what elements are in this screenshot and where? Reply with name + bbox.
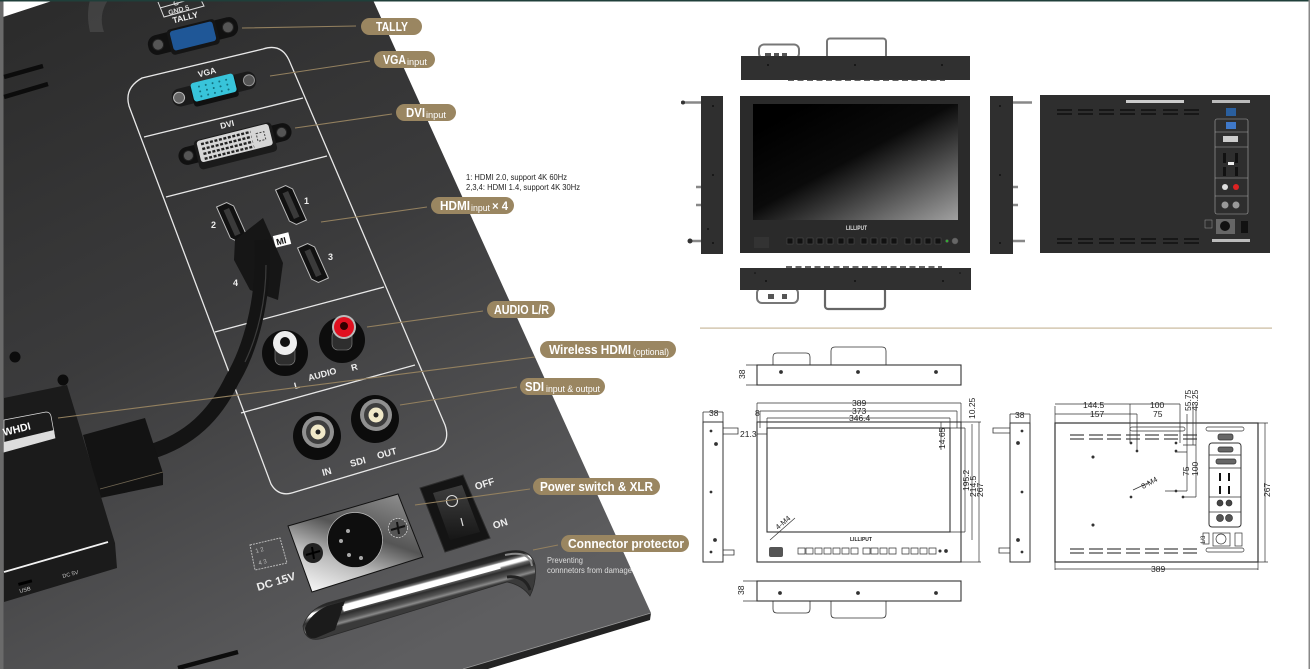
label: TALLY (361, 18, 422, 35)
label: SDI input and output (520, 378, 605, 395)
icon: chrome connector protector handle (303, 551, 535, 639)
drawing: rear view with dimensions: 1/3 (1201, 535, 1207, 544)
tally pin label box: G (173, 0, 180, 8)
label: DVI input (396, 104, 456, 121)
page top rule (0, 0, 1310, 2)
drawing: left side view (703, 408, 738, 562)
icon: RCA audio jacks: L (293, 380, 301, 391)
drawing: left side view: 38 (709, 408, 719, 418)
label: DVI input: DVI (406, 105, 425, 120)
drawing: rear view with dimensions: 144.5 (1083, 400, 1105, 410)
icon: DVI connector: DVI (219, 118, 235, 131)
icon: VGA connector (167, 56, 259, 112)
icon: DC 15V pin diagram (250, 538, 298, 594)
icon: DC 15V pin diagram: 4 3 (258, 559, 268, 567)
drawing: front view with dimensions: 4-M4 (774, 514, 792, 532)
page right edge (1308, 0, 1310, 669)
icon: HDMI ports: 4 (233, 278, 238, 288)
drawing: bottom view (736, 581, 961, 618)
label: HDMI input x 4: × 4 (492, 199, 508, 213)
note: HDMI versions (466, 173, 580, 192)
drawing: front view with dimensions: 373 (852, 406, 866, 416)
drawing: rear view with dimensions: 389 (1151, 564, 1165, 574)
wireless HDMI module: USB (19, 586, 32, 595)
drawing: right side view (993, 410, 1030, 562)
drawing: rear view with dimensions: 157 (1090, 409, 1104, 419)
wireless HDMI module (2, 385, 117, 602)
icon: HDMI ports (211, 183, 333, 288)
icon: SDI BNC connectors: OUT (376, 446, 398, 462)
label: AUDIO L/R: AUDIO L/R (494, 302, 549, 317)
label: SDI input and output: input & output (546, 384, 600, 395)
label: Connector protector: Connector protector (568, 536, 684, 551)
icon: HDMI ports: MI (275, 235, 287, 247)
drawing: rear view with dimensions: 43.25 (1190, 389, 1200, 411)
tally pin label box: GND 5 (168, 5, 190, 17)
front buttons (754, 237, 958, 248)
drawing: front view with dimensions: 14.65 (937, 427, 947, 449)
drawing: rear view with dimensions: 100 (1190, 462, 1200, 476)
note: protector caption (547, 556, 632, 575)
icon: power rocker switch: ON (492, 517, 509, 532)
label: VGA input: VGA (383, 52, 406, 67)
drawing: rear view with dimensions: 100 (1150, 400, 1164, 410)
drawing: right side view: 38 (1015, 410, 1025, 420)
wireless HDMI module: DC 5V (62, 570, 79, 580)
label: Power switch and XLR: Power switch & XLR (540, 479, 654, 494)
note: protector caption: Preventing (547, 556, 583, 565)
drawing: front view with dimensions: 195.2 (961, 469, 971, 491)
front logo: LILLIPUT (846, 225, 867, 232)
icon: power rocker switch (420, 475, 509, 552)
icon: HDMI ports: 1 (304, 196, 309, 206)
label: Wireless HDMI optional: (optional) (633, 347, 669, 357)
label: HDMI input x 4 (431, 197, 514, 214)
icon: HDMI ports: 2 (211, 220, 216, 230)
label: HDMI input x 4: HDMI (440, 198, 470, 213)
monitor right side view (990, 96, 1032, 254)
icon: TALLY connector (142, 1, 241, 61)
icon: HDMI ports: 3 (328, 252, 333, 262)
label: VGA input: input (407, 57, 427, 68)
label: DVI input: input (426, 110, 446, 121)
icon: DC 15V pin diagram: 1 2 (255, 547, 265, 555)
label: SDI input and output: SDI (525, 379, 544, 394)
icon: SDI BNC connectors: IN (321, 466, 333, 479)
drawing: rear view with dimensions: 8-M4 (1140, 475, 1159, 491)
drawing: rear view with dimensions (1055, 389, 1272, 574)
divider (700, 328, 1272, 329)
label: Wireless HDMI optional: Wireless HDMI (549, 342, 631, 357)
drawing: rear view with dimensions: 75 (1181, 466, 1191, 476)
icon: RCA audio jacks: R (350, 361, 359, 373)
screen (753, 104, 958, 220)
monitor front view (740, 96, 970, 253)
monitor bottom view (740, 267, 971, 309)
drawing: front view with dimensions: 8 (755, 408, 760, 418)
connector panel outline (128, 47, 447, 494)
note: HDMI versions: 2,3,4: HDMI 1.4, support 4K 30Hz (466, 183, 580, 192)
drawing: front view with dimensions: 10.25 (967, 397, 977, 419)
note: protector caption: connnetors from damage (547, 566, 632, 575)
drawing: front view with dimensions: 267 (975, 483, 985, 497)
icon: SDI BNC connectors: SDI (349, 455, 367, 470)
icon: DC 15V pin diagram: DC 15V (255, 571, 298, 594)
icon: VGA connector: VGA (197, 65, 217, 79)
note: HDMI versions: 1: HDMI 2.0, support 4K 60Hz (466, 173, 567, 182)
monitor top view (741, 38, 970, 80)
label: HDMI input x 4: input (471, 203, 490, 214)
drawing: top view (737, 347, 961, 385)
label: VGA input (374, 51, 435, 68)
icon: SDI BNC connectors (293, 395, 399, 479)
icon: RCA audio jacks (262, 315, 365, 391)
drawing: front view with dimensions: LILLIPUT (850, 537, 872, 543)
monitor left side view (681, 96, 723, 254)
wireless HDMI module: WHDI (2, 420, 32, 439)
icon: XLR connector plate (288, 494, 423, 592)
icon: HDMI cable (83, 218, 283, 498)
drawing: bottom view: 38 (736, 585, 746, 595)
monitor rear view (1040, 95, 1270, 253)
icon: DVI connector (172, 105, 295, 175)
drawing: front view with dimensions: 21.3 (740, 429, 757, 439)
icon: power rocker switch: OFF (474, 477, 496, 493)
drawing: rear view with dimensions: 55.75 (1183, 389, 1193, 411)
drawing: top view: 38 (737, 369, 747, 379)
leader lines (58, 26, 558, 550)
drawing: front view with dimensions: 346.4 (849, 413, 871, 423)
label: Wireless HDMI optional (540, 341, 676, 358)
drawing: front view with dimensions: 214.5 (968, 475, 978, 497)
icon: TALLY connector: TALLY (171, 9, 199, 25)
drawing: rear view with dimensions: 267 (1262, 483, 1272, 497)
drawing: front view with dimensions (740, 397, 985, 562)
drawing: rear view with dimensions: 75 (1153, 409, 1163, 419)
drawing: front view with dimensions: 389 (852, 398, 866, 408)
tally pin label box (158, 0, 204, 17)
label: TALLY: TALLY (376, 19, 408, 34)
icon: RCA audio jacks: AUDIO (307, 366, 338, 383)
panel: monitor rear close-up (0, 0, 651, 669)
